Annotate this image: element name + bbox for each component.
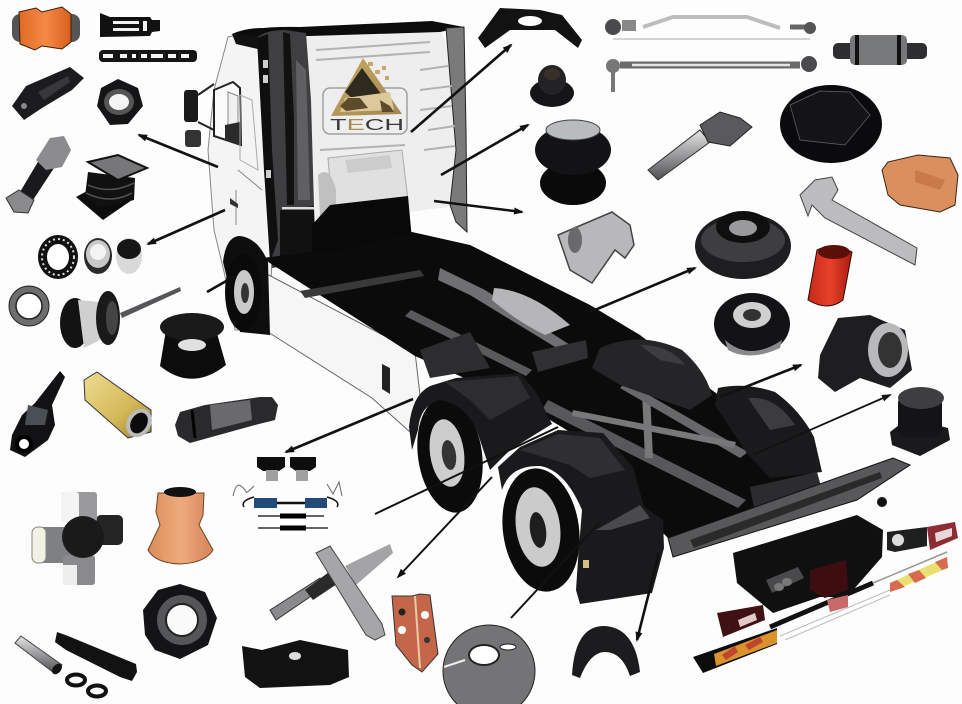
part: chrome cylinder <box>648 112 752 180</box>
part: bump stop <box>530 65 574 107</box>
part: center bearing 2 <box>714 293 790 356</box>
part: grey wedge <box>558 212 634 283</box>
front axle wheel <box>410 393 490 517</box>
part: dust disc <box>443 625 535 704</box>
part: steel pin <box>15 636 64 676</box>
truck illustration <box>184 21 958 673</box>
part: shock absorber <box>270 544 393 640</box>
part: center bearing 1 <box>695 211 791 279</box>
left lamp <box>717 605 765 637</box>
dark column <box>257 30 314 268</box>
part: air bellow <box>175 397 278 443</box>
far fender 1 <box>592 339 712 410</box>
part: red tube <box>808 245 852 306</box>
dimension line <box>613 38 810 40</box>
cab side <box>208 30 272 330</box>
part: universal joint <box>32 492 123 585</box>
part: joint <box>12 67 84 120</box>
arrow: frame to rubber mount <box>753 395 890 455</box>
line: axle <box>375 427 558 514</box>
arrow: rear wall to air spring <box>441 125 528 175</box>
right lamp arm <box>887 527 927 552</box>
mirror lower <box>185 130 201 147</box>
small red lamp <box>827 595 848 612</box>
part: T-bolt <box>800 177 917 265</box>
part: bolt <box>6 136 71 213</box>
warning bar rod <box>770 583 873 627</box>
right lamp <box>927 522 958 550</box>
part: orange bushing <box>12 7 80 50</box>
part: air spring <box>535 120 611 205</box>
part: black cone <box>160 313 226 379</box>
part: red bracket <box>392 594 438 672</box>
part: rubber bush <box>833 35 927 65</box>
rear wall <box>306 27 456 224</box>
part: o-rings <box>67 674 106 696</box>
arrow: axle to bracket <box>398 477 492 577</box>
logo wordmark: T E CH <box>330 117 404 134</box>
part: brake chamber <box>60 287 181 348</box>
near fender 1 <box>409 373 552 470</box>
part: brake pad <box>242 640 349 688</box>
box end <box>750 472 822 508</box>
cab wheel <box>223 236 270 335</box>
frame rails <box>300 268 748 508</box>
arrow: chassis to spring kit <box>286 399 413 452</box>
part: pin <box>100 13 160 37</box>
part: rubber mount right <box>890 387 950 456</box>
logo <box>330 58 404 134</box>
part: tie rod lower <box>606 56 817 92</box>
part: bushing sleeve <box>116 238 142 274</box>
arrow: chassis to center bearing <box>590 268 695 312</box>
part: gold bushing <box>84 372 157 442</box>
part: tie rod upper <box>605 17 816 35</box>
part: top bracket <box>478 8 582 48</box>
window frame <box>214 82 241 145</box>
line: fender to disc <box>511 523 599 618</box>
warning plate right <box>890 557 948 592</box>
part: orange cone <box>148 487 213 564</box>
part: thrust bearing <box>38 235 78 279</box>
part: rubber mount <box>76 155 147 220</box>
logo triangle <box>331 58 402 116</box>
tow hitch <box>733 515 883 613</box>
arrow: rear wall to wedge <box>434 201 522 212</box>
part: perforated plate <box>99 50 197 62</box>
arrow: cab to flange <box>139 135 218 167</box>
rear axle wheel <box>495 463 587 597</box>
part: seal ring <box>9 286 49 326</box>
near fender 2 <box>498 430 664 604</box>
mirror upper <box>184 90 198 122</box>
arrow: frame to cast block <box>720 365 801 397</box>
part: flange ring <box>97 79 143 125</box>
part: brake spring kit <box>233 457 342 528</box>
arrow: rear wall to bracket <box>411 45 511 132</box>
part: bearing race <box>84 238 112 274</box>
part: black dome <box>780 85 882 163</box>
part: cast block <box>818 315 912 392</box>
arrow: fender to half ring <box>637 553 659 640</box>
line: front wheel <box>207 276 235 292</box>
part: black shaft <box>55 632 137 681</box>
part: black lever <box>10 371 65 457</box>
rear crossbar <box>668 458 910 557</box>
far fender 2 <box>715 386 822 478</box>
part: lock nut <box>143 584 217 659</box>
warning plate left <box>693 628 777 673</box>
arrow: cab to bearing set <box>148 210 225 244</box>
side skirt <box>263 272 420 432</box>
part: half ring <box>572 626 640 678</box>
arrows <box>139 45 890 640</box>
base panel <box>312 196 412 260</box>
chassis <box>262 232 820 540</box>
part: orange block <box>882 155 958 212</box>
